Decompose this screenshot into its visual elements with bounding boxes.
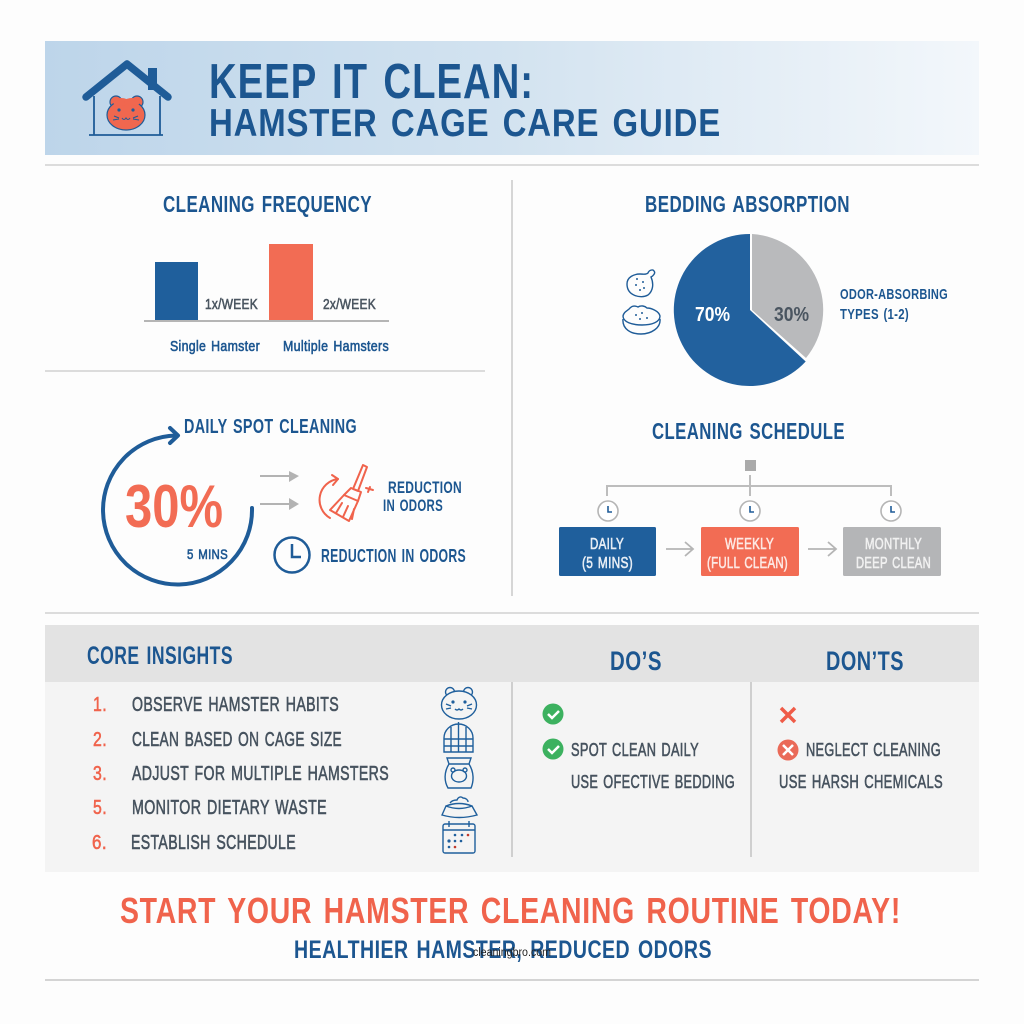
box: daily: (5 MINS) [582,555,633,572]
title: KEEP IT CLEAN: [209,55,534,109]
heading: core insights: CORE INSIGHTS [87,642,233,670]
icon: clocks [598,501,901,521]
text: reduction in odors: IN ODORS [383,497,443,515]
icon: food bowl [442,797,477,818]
icon: food bag [445,758,473,788]
list: core insights: 2. [93,729,107,751]
icon: cage [444,722,473,752]
box: daily: DAILY [590,536,624,553]
header banner [45,41,979,155]
list: core insights: MONITOR DIETARY WASTE [132,797,327,819]
list: core insights: OBSERVE HAMSTER HABITS [132,694,339,716]
heading: don'ts: DON’TS [826,646,904,676]
heading: do's: DO’S [610,646,662,676]
icon: broom [320,465,373,521]
call to action [120,890,901,964]
stat: 30%: 30% [125,473,223,540]
pie chart: 30% [774,304,809,326]
bar chart: Multiple Hamsters [283,338,389,355]
icon: hamster face [442,688,476,719]
box: weekly [701,527,799,576]
heading: cleaning schedule: CLEANING SCHEDULE [652,418,845,444]
box: daily [559,527,656,576]
list: core insights: 1. [93,694,107,716]
icon: house with hamster [86,64,168,135]
tree connector [607,460,891,496]
panel: insights, do's and don'ts [45,625,979,872]
list: don'ts [778,708,943,792]
box: monthly: DEEP CLEAN [856,555,931,572]
bar chart: Single Hamster [170,338,260,355]
list: do's [542,704,735,792]
box: weekly: WEEKLY [725,536,774,553]
bar chart: 1x/WEEK [205,296,258,313]
icon: clock [274,538,310,572]
list: core insights: CLEAN BASED ON CAGE SIZE [132,729,342,751]
heading: daily spot cleaning: DAILY SPOT CLEANING [184,416,357,438]
list: core insights [92,694,389,854]
title [209,55,721,145]
icons: bedding [623,270,660,334]
heading: cleaning frequency: CLEANING FREQUENCY [163,191,372,217]
arrows [260,471,299,510]
text: reduction in odors [383,479,462,515]
box: monthly [843,527,941,576]
text: reduction in odors: REDUCTION IN ODORS [321,546,466,566]
box: weekly: (FULL CLEAN) [707,555,788,572]
subheading: HEALTHIER HAMSTER, REDUCED ODORS [294,936,712,964]
list: do's: SPOT CLEAN DAILY [571,739,699,760]
bar chart [144,244,389,355]
text: reduction in odors: REDUCTION [388,479,462,497]
list: do's: USE OFECTIVE BEDDING [571,771,735,792]
panel: daily spot cleaning [103,416,466,584]
list: core insights: 5. [93,797,107,819]
icons: insights [442,688,477,853]
bar chart: 2x/WEEK [323,296,376,313]
heading: bedding absorption: BEDDING ABSORPTION [645,191,850,217]
list: core insights: 6. [92,832,107,854]
list: don'ts: USE HARSH CHEMICALS [779,771,943,792]
list: core insights: ADJUST FOR MULTIPLE HAMSTERS [132,763,389,785]
list: core insights: 3. [93,763,107,785]
panel: cleaning frequency [144,191,389,355]
box: monthly: MONTHLY [865,536,922,553]
watermark: cleaningbro.com [473,947,551,959]
pie label: ODOR-ABSORBING [840,286,948,303]
circular arrow [103,428,252,584]
icon: calendar [443,821,475,853]
panel: cleaning schedule [559,418,941,576]
label: 5 mins: 5 MINS [187,546,228,562]
pie label: TYPES (1-2) [840,306,909,323]
list: core insights: ESTABLISH SCHEDULE [131,832,296,854]
title: HAMSTER CAGE CARE GUIDE [209,102,721,145]
panel: bedding absorption [623,191,948,386]
pie chart [674,234,823,386]
list: don'ts: NEGLECT CLEANING [806,739,941,760]
pie label [840,286,948,323]
arrow [808,542,836,556]
arrow [666,542,693,556]
pie chart: 70% [695,304,730,326]
